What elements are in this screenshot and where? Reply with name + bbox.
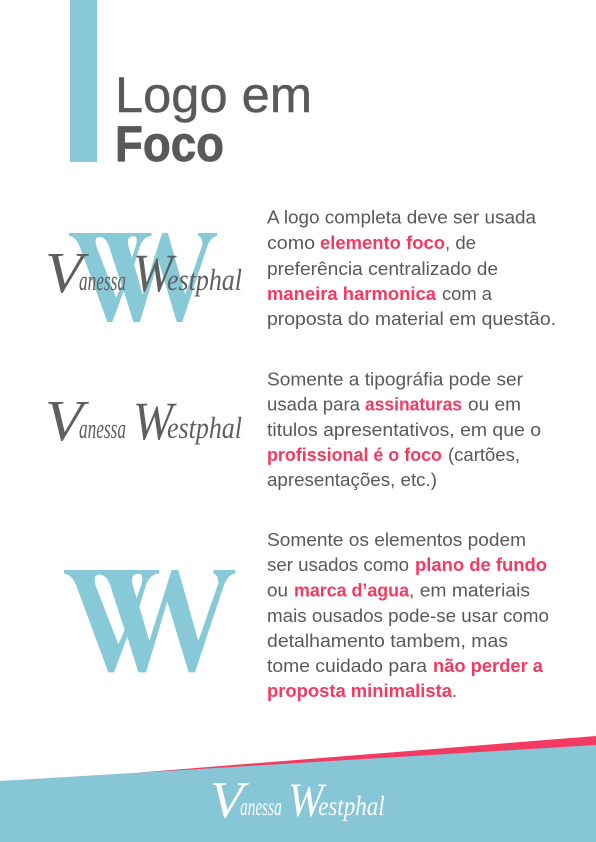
footer script name: anessa <box>240 794 282 821</box>
text block: monogram usage: proposta minimalista <box>267 680 453 701</box>
text block: monogram usage: , em materiais <box>409 580 530 600</box>
icon: large WW monogram <box>64 570 235 672</box>
text block: full logo usage: , de <box>445 232 476 253</box>
text block: full logo usage: como <box>267 232 315 253</box>
text block: typography usage: usada para <box>267 394 361 414</box>
text block: typography usage: profissional é o foco <box>267 444 442 465</box>
title: Foco <box>115 116 224 172</box>
script name logo: V <box>45 388 90 453</box>
script name logo <box>45 388 242 453</box>
text block: typography usage: Somente a tipográfia pode ser <box>267 368 523 390</box>
script name logo: estphal <box>167 410 242 445</box>
text block: full logo usage: maneira harmonica <box>267 283 437 304</box>
text block: monogram usage: detalhamento tambem, mas <box>267 630 508 651</box>
text block: monogram usage: Somente os elementos podem <box>267 529 526 550</box>
footer script name <box>210 772 385 829</box>
full logo: monogram and script name <box>45 233 242 322</box>
footer: pink accent stripe <box>140 736 596 774</box>
text block: typography usage: titulos apresentativos, em que o <box>267 419 541 440</box>
footer script name: W <box>288 774 327 827</box>
text block: typography usage: (cartões, <box>448 444 520 465</box>
text block: typography usage: assinaturas <box>365 394 462 414</box>
text block: monogram usage: ou <box>267 580 288 600</box>
script name: V <box>45 240 90 305</box>
footer script name: estphal <box>318 791 385 821</box>
script name: W <box>133 243 177 303</box>
text block: typography usage: ou em <box>468 394 521 414</box>
title: Logo em <box>115 67 312 123</box>
text block: monogram usage <box>267 529 549 701</box>
script name logo: W <box>133 391 177 451</box>
text block: monogram usage: . <box>452 680 457 701</box>
footer script name: V <box>210 772 250 829</box>
text block: full logo usage: preferência centralizado de <box>267 258 498 279</box>
text block: monogram usage: mais ousados pode-se usar como <box>267 605 549 626</box>
text block: full logo usage: com a <box>442 283 493 304</box>
text block: monogram usage: tome cuidado para <box>267 655 428 676</box>
text block: full logo usage <box>267 206 556 329</box>
text block: monogram usage: não perder a <box>433 655 544 676</box>
script name: estphal <box>167 262 242 297</box>
text block: full logo usage: elemento foco <box>320 232 445 253</box>
accent bar <box>70 0 97 162</box>
title <box>115 67 312 172</box>
text block: typography usage: apresentações, etc.) <box>267 469 437 490</box>
text block: monogram usage: marca d’agua <box>294 580 410 600</box>
icon: WW monogram <box>69 233 217 322</box>
script name logo: anessa <box>79 414 126 445</box>
text block: monogram usage: ser usados como <box>267 554 409 575</box>
text block: typography usage <box>267 368 541 490</box>
script name: anessa <box>79 266 126 297</box>
text block: full logo usage: proposta do material em questão. <box>267 308 556 329</box>
script name <box>45 240 242 305</box>
footer: blue band <box>0 745 596 842</box>
text block: full logo usage: A logo completa deve ser usada <box>267 206 537 228</box>
text block: monogram usage: plano de fundo <box>415 554 547 575</box>
